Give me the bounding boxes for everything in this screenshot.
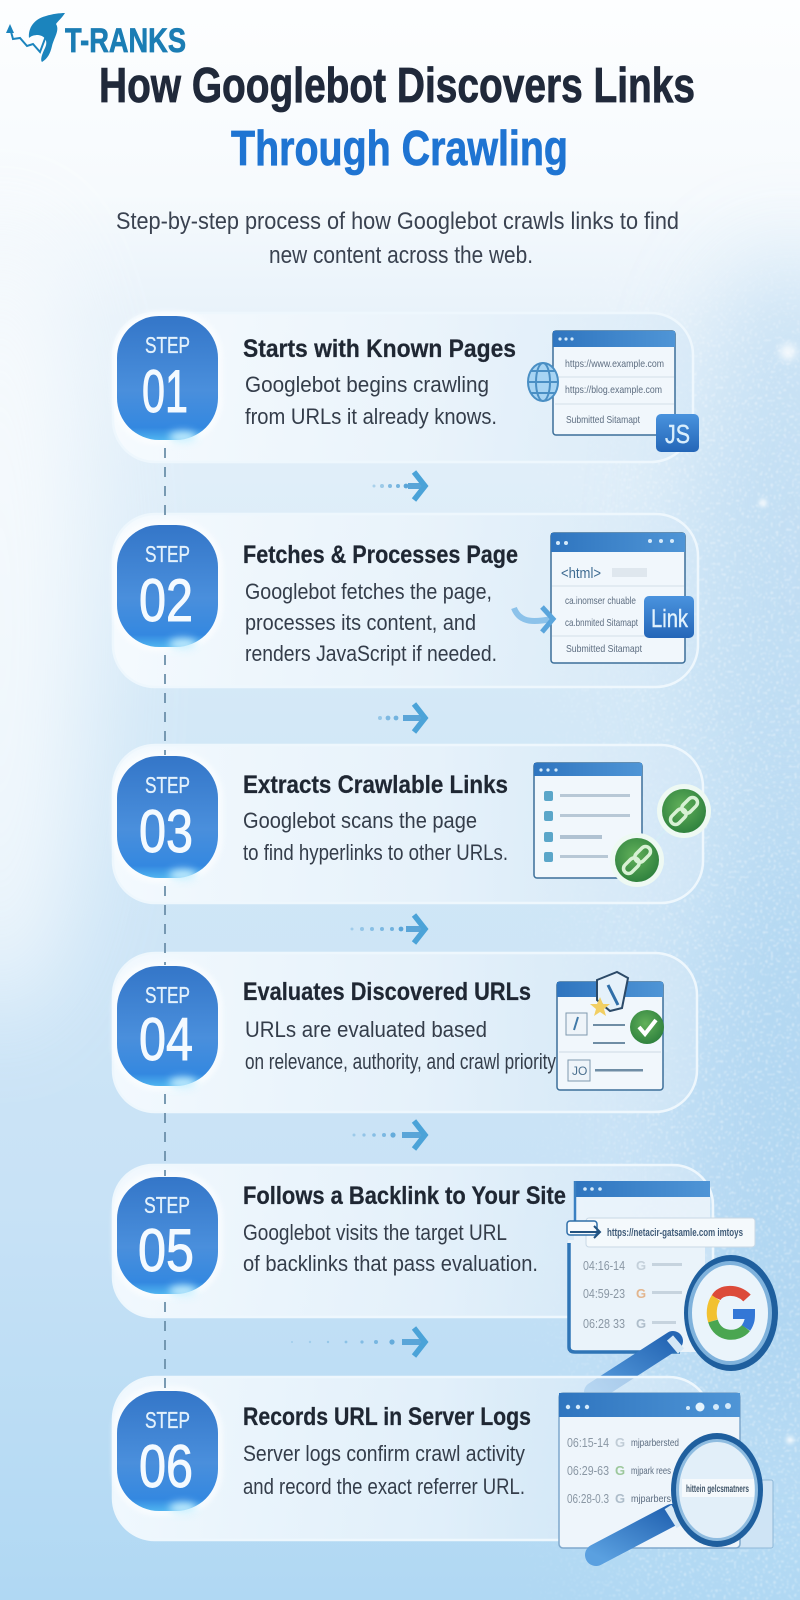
subtitle: new content across the web. [269,242,533,269]
description: processes its content, and [245,610,476,635]
heading: Follows a Backlink to Your Site [243,1182,566,1210]
step badge 05 [112,1172,223,1299]
icon: Google G [712,1291,750,1335]
illustration: crawl log window with magnifier: 04:59-23 [583,1286,625,1301]
description [245,1017,556,1074]
icon: green check [630,1010,664,1044]
illustration: evaluation window: JO [572,1064,587,1078]
step badge 04: STEP [145,982,190,1008]
magnifier with referrer URL [596,1433,763,1555]
illustration: crawl log window with magnifier: G [636,1286,646,1301]
heading: Extracts Crawlable Links [243,771,508,799]
illustration: URL list window: https://www.example.com [565,358,664,370]
illustration: server log window with magnifier: G [615,1463,625,1478]
description: Googlebot fetches the page, [245,579,492,604]
illustration: server log window with magnifier: G [615,1435,625,1450]
step badge 03: 03 [139,798,193,865]
description: Googlebot scans the page [243,808,477,833]
panel background [113,1165,713,1317]
icon: globe [528,363,558,401]
heading: Starts with Known Pages [243,335,516,363]
step badge 01: STEP [145,332,190,358]
panel: step 04 [112,953,697,1112]
step badge 02 [112,520,223,652]
step badge 03: STEP [145,772,190,798]
step badge 01 [112,311,223,445]
step badge 06: STEP [145,1407,190,1433]
illustration: crawl log window with magnifier: 06:28 33 [583,1316,625,1331]
step badge 01: 01 [142,358,188,425]
panel background [113,745,703,903]
subtitle: Step-by-step process of how Googlebot crawls links to find [116,208,679,235]
illustration: link list window [534,763,711,887]
illustration: crawl log window with magnifier [567,1181,778,1392]
description: URLs are evaluated based [245,1017,487,1042]
arrow between steps 5 and 6 [291,1328,425,1356]
step badge 04 [112,961,223,1091]
illustration: HTML window: Submitted Sitamapt [566,643,642,655]
icon: curved arrow [514,607,553,632]
illustration: server log window with magnifier: 06:28-0.3 [567,1491,609,1506]
illustration: server log window with magnifier: 06:29-63 [567,1463,609,1478]
description: Server logs confirm crawl activity [243,1441,525,1466]
badge: JS: JS [665,419,690,449]
illustration: server log window with magnifier: 06:15-14 [567,1435,609,1450]
badge: Link [644,596,694,638]
magnifier with Google G [594,1255,778,1392]
description: of backlinks that pass evaluation. [243,1251,538,1276]
heading: Records URL in Server Logs [243,1403,531,1431]
illustration: server log window with magnifier: G [615,1491,625,1506]
panel background [113,953,697,1112]
illustration: HTML window: ca.inomser chuable [565,595,636,607]
illustration: crawl log window with magnifier: 04:16-14 [583,1258,625,1273]
illustration: server log window with magnifier: mjparbers [631,1493,671,1505]
logo: T-RANKS [6,13,186,62]
arrow between steps 3 and 4 [350,915,425,943]
description: renders JavaScript if needed. [245,641,497,666]
illustration: HTML window: <html> [561,565,601,582]
panel background [113,313,693,462]
panel: step 05 [112,1165,778,1392]
description [243,1441,525,1499]
illustration: evaluation window [557,972,664,1090]
arrow between steps 2 and 3 [378,704,425,732]
icon: logo mark with arrow line [6,13,65,62]
description: Googlebot begins crawling [245,372,489,397]
step badge 05: STEP [144,1192,190,1218]
icon: cards [597,972,628,1011]
description: and record the exact referrer URL. [243,1474,525,1499]
step badge 03 [112,751,223,883]
panel: step 06 [112,1377,773,1555]
description [243,808,508,865]
subtitle [116,208,679,269]
illustration: server log window with magnifier: mjparbersted [631,1437,679,1449]
illustration: HTML window: ca.bnmited Sitamapt [565,617,638,629]
illustration: crawl log window with magnifier: G [636,1258,646,1273]
heading: Evaluates Discovered URLs [243,978,531,1006]
icon: green link 2 [610,833,664,887]
description [245,579,497,666]
step badge 06: 06 [139,1433,193,1500]
URL bar [567,1218,755,1247]
step badge 04: 04 [139,1006,193,1073]
badge: Link: Link [651,605,688,633]
step badge 02: STEP [145,541,190,567]
step badge 06 [112,1386,223,1516]
panel background [113,1377,711,1540]
description: to find hyperlinks to other URLs. [243,840,508,865]
illustration: URL list window [528,331,699,452]
logo wordmark: T-RANKS [65,22,186,60]
panel background [113,514,698,687]
step badge 05: 05 [138,1217,194,1284]
dashed timeline connector [164,448,166,1390]
illustration: server log window with magnifier [559,1393,773,1555]
magnifier with referrer URL: hittein gelcsmatners [686,1484,749,1495]
arrow between steps 4 and 5 [352,1121,425,1149]
description: Googlebot visits the target URL [243,1220,507,1245]
heading: Fetches & Processes Page [243,541,518,569]
arrow between steps 1 and 2 [372,472,425,500]
icon: star [590,997,610,1016]
description: on relevance, authority, and crawl priority [245,1049,556,1074]
illustration: URL list window: Submitted Sitamapt [566,414,640,426]
panel: step 03 [112,745,711,903]
title [99,59,695,176]
illustration: HTML window [514,533,694,663]
description [243,1220,538,1276]
illustration: crawl log window with magnifier: G [636,1316,646,1331]
panel: step 02 [112,514,698,687]
illustration: URL list window: https://blog.example.com [565,384,662,396]
icon: green link 1 [657,784,711,838]
badge: JS [656,414,699,452]
description [245,372,497,429]
step badge 02: 02 [139,567,193,634]
URL bar: https://netacir-gatsamle.com imtoys [607,1227,743,1239]
description: from URLs it already knows. [245,404,497,429]
title line two: Through Crawling [231,122,568,176]
panel: step 01 [112,311,699,462]
illustration: server log window with magnifier: mjpark rees [631,1465,671,1477]
